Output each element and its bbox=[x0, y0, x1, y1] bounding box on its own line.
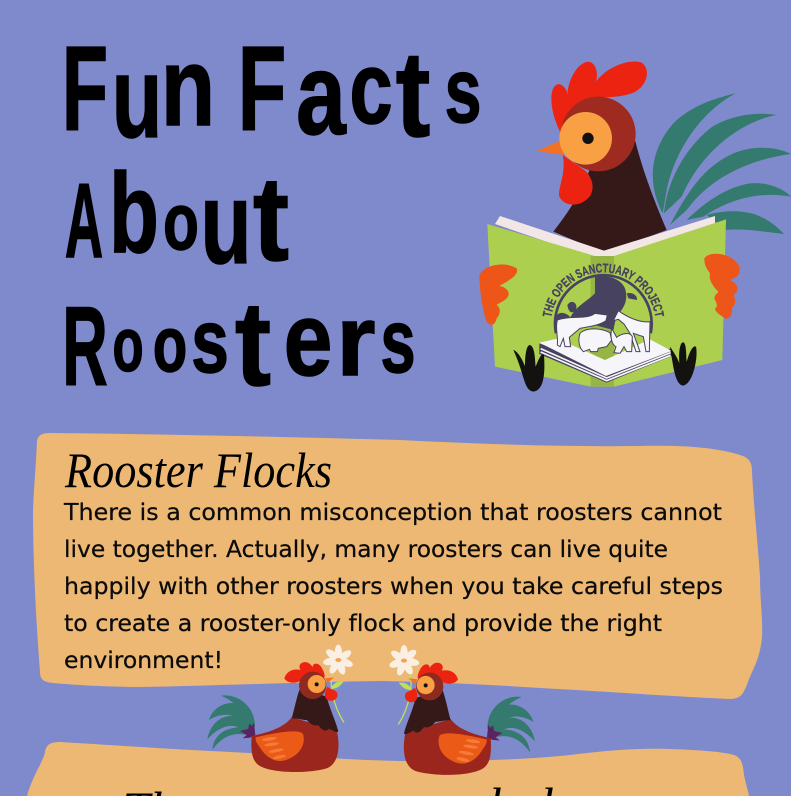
title: b bbox=[109, 150, 159, 276]
rooster eye bbox=[559, 112, 612, 165]
book spine bbox=[591, 256, 614, 387]
small rooster wattle bbox=[325, 687, 337, 701]
title: s bbox=[191, 291, 229, 391]
rooster neck bbox=[553, 140, 667, 253]
illustration: two roosters holding flowers bbox=[207, 645, 535, 775]
left small rooster bbox=[207, 645, 354, 772]
small rooster neck bbox=[292, 688, 338, 732]
small rooster wing bbox=[256, 731, 304, 761]
panel: rooster flocks background bbox=[33, 433, 762, 699]
title: a bbox=[296, 29, 347, 159]
logo open book bbox=[539, 339, 672, 383]
small rooster comb bbox=[284, 662, 325, 683]
text block: rooster flocks body: environment! bbox=[64, 646, 223, 674]
title: u bbox=[112, 34, 162, 162]
title: t bbox=[253, 153, 289, 286]
flower bbox=[323, 645, 354, 676]
text block: rooster flocks body: There is a common misconception that roosters cannot bbox=[63, 498, 722, 526]
title: s bbox=[380, 292, 416, 392]
title: o bbox=[163, 177, 199, 266]
title: r bbox=[337, 285, 375, 397]
panel: second card background bbox=[27, 742, 749, 796]
title: e bbox=[284, 282, 332, 398]
rooster right wing-hand bbox=[704, 254, 740, 319]
title: t bbox=[396, 26, 430, 162]
small rooster beak bbox=[325, 677, 334, 683]
book cover bbox=[487, 219, 726, 387]
title: u bbox=[200, 160, 252, 288]
illustration: rooster reading a book bbox=[479, 62, 791, 392]
small rooster tail bbox=[207, 695, 255, 750]
title: o bbox=[153, 301, 187, 388]
title: R bbox=[62, 285, 108, 410]
title: t bbox=[235, 278, 271, 411]
small rooster eye bbox=[308, 675, 326, 693]
title: s bbox=[445, 38, 481, 142]
title: c bbox=[349, 32, 393, 146]
heading: second card (clipped at page bottom) bbox=[122, 777, 554, 796]
text block: rooster flocks body: live together. Actually, many roosters can live quite bbox=[64, 535, 668, 563]
title: o bbox=[112, 302, 144, 387]
rooster left wing-hand bbox=[479, 265, 517, 325]
rooster tail feathers bbox=[653, 93, 791, 234]
title: F bbox=[238, 21, 286, 156]
text block: rooster flocks body: to create a rooster-only flock and provide the right bbox=[64, 609, 662, 637]
logo wordmark: THE OPEN SANCTUARY PROJECT bbox=[542, 263, 664, 316]
text block: rooster flocks body: happily with other roosters when you take careful steps bbox=[64, 572, 723, 600]
text block: rooster flocks body bbox=[63, 498, 723, 674]
logo animals bbox=[556, 311, 650, 353]
title: F bbox=[62, 22, 108, 156]
small rooster head bbox=[299, 672, 326, 699]
small rooster tail base bbox=[240, 723, 255, 738]
rooster comb bbox=[551, 62, 647, 135]
right small rooster bbox=[388, 645, 535, 775]
flower stem and leaf bbox=[331, 673, 344, 723]
title: n bbox=[161, 26, 215, 149]
rooster head bbox=[561, 97, 636, 171]
rooster wattle bbox=[559, 155, 593, 205]
heading: Rooster Flocks: Rooster Flocks bbox=[64, 442, 332, 498]
book pages bbox=[495, 216, 715, 258]
title: A bbox=[65, 161, 103, 280]
small rooster body bbox=[251, 717, 339, 772]
title bbox=[62, 21, 481, 411]
rooster beak bbox=[537, 141, 564, 155]
rooster left foot bbox=[513, 345, 544, 392]
logo globe bbox=[555, 275, 652, 333]
logo: The Open Sanctuary Project bbox=[539, 263, 672, 383]
rooster right foot bbox=[670, 342, 697, 386]
